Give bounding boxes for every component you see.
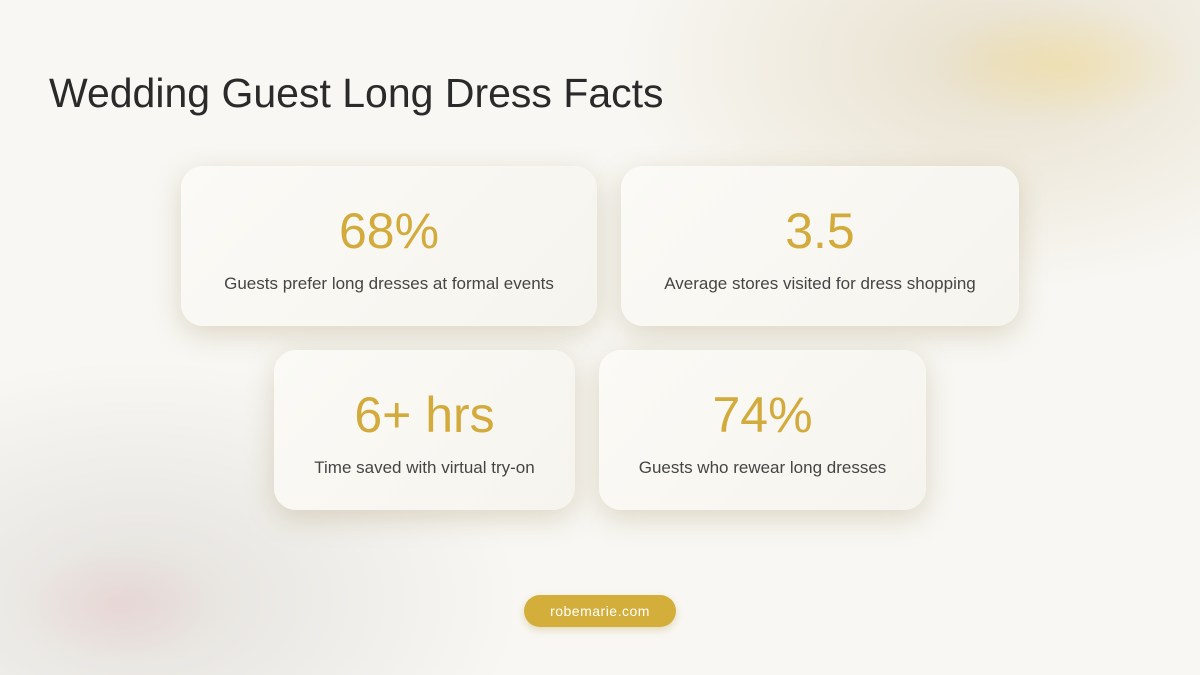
card: 68%: 68% xyxy=(339,203,439,259)
card: 74%: 74% xyxy=(712,387,813,443)
card: 3.5 xyxy=(621,166,1019,326)
card: 3.5: 3.5 xyxy=(785,203,855,259)
card: 68%: Guests prefer long dresses at formal events xyxy=(224,274,554,293)
card: 74% xyxy=(599,350,926,510)
card: 6+ hrs: 6+ hrs xyxy=(354,387,495,443)
card: 6+ hrs xyxy=(274,350,575,510)
card: 74%: Guests who rewear long dresses xyxy=(639,458,886,477)
card: 68% xyxy=(181,166,597,326)
card: 6+ hrs: Time saved with virtual try-on xyxy=(314,458,535,477)
footer pill: robemarie.com xyxy=(550,603,650,619)
footer pill xyxy=(524,595,676,627)
card: 3.5: Average stores visited for dress shopping xyxy=(664,274,976,293)
title: Wedding Guest Long Dress Facts xyxy=(49,70,664,116)
